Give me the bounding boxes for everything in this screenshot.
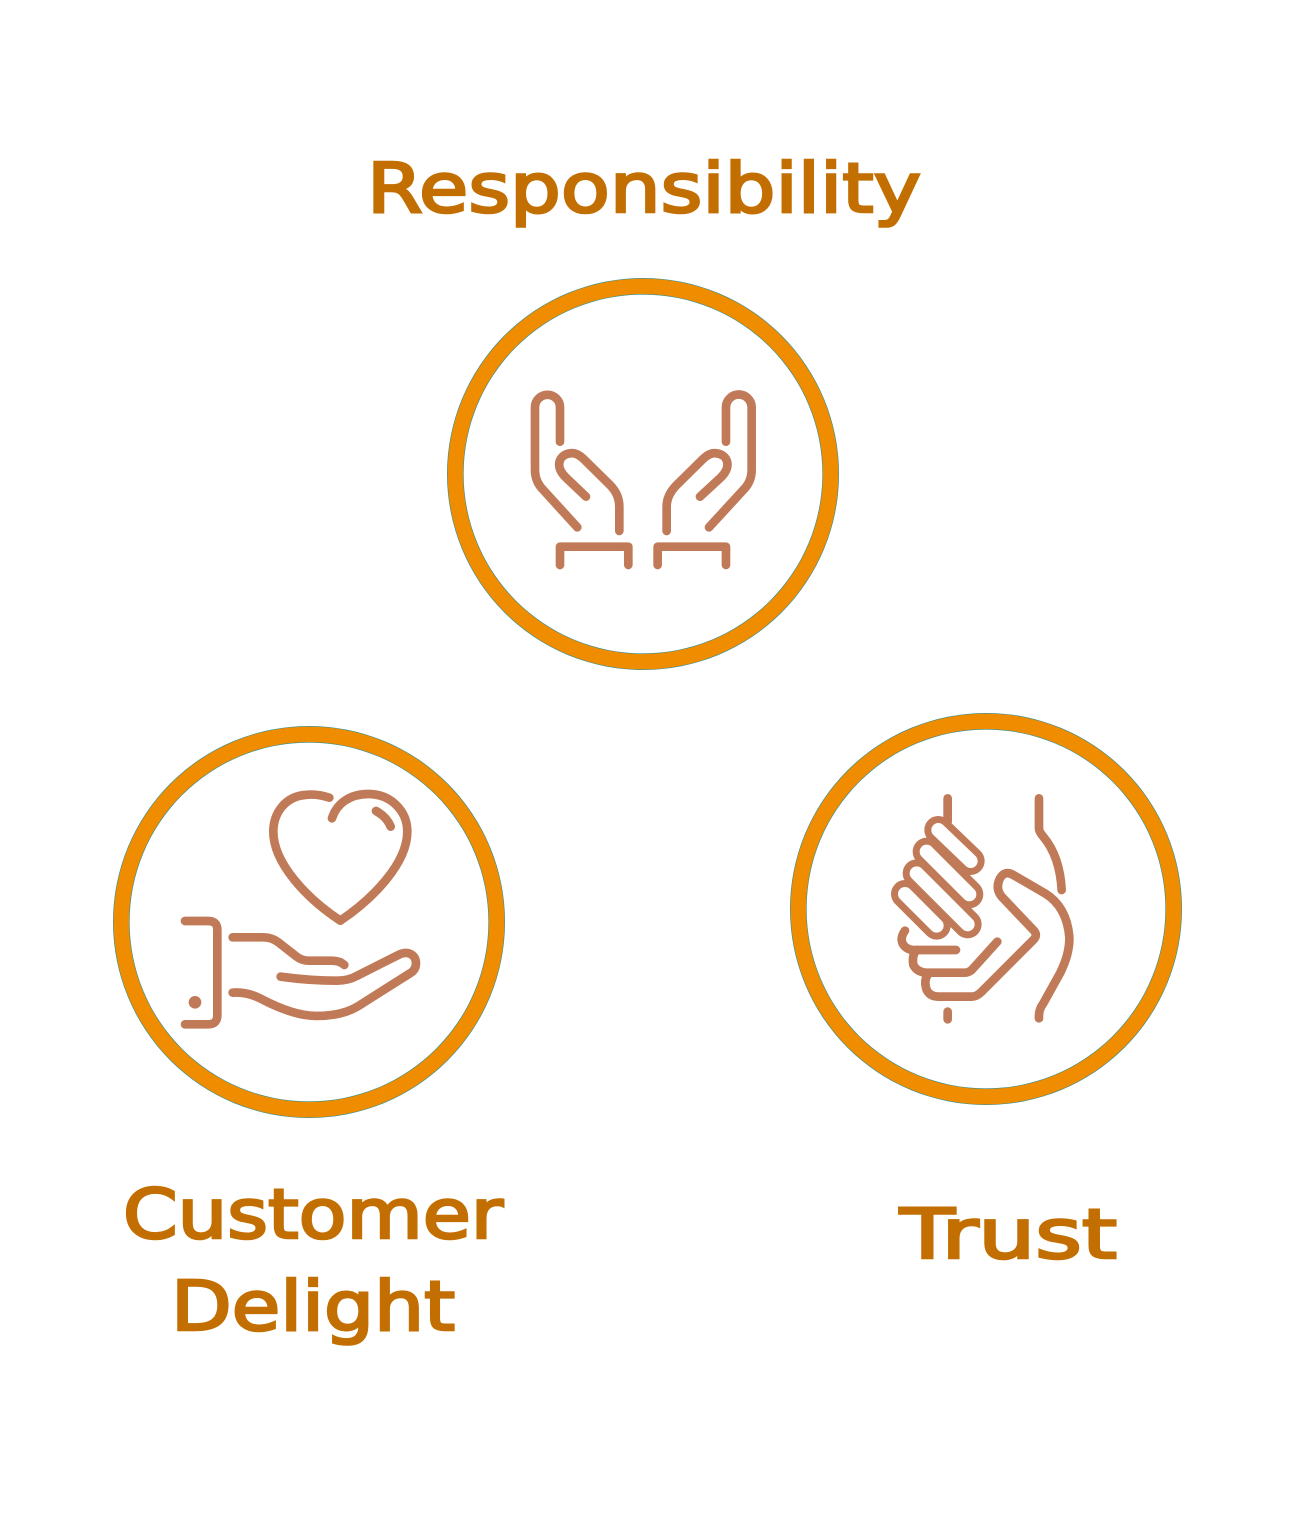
heading: Customer Delight: Delight xyxy=(171,1267,455,1347)
heading: Trust: Trust xyxy=(899,1195,1117,1275)
heading: Customer Delight: Customer xyxy=(123,1175,504,1255)
icon: clasped helping hands xyxy=(902,798,1069,1019)
panel: responsibility circle xyxy=(447,278,839,670)
heading: Responsibility: Responsibility xyxy=(367,149,921,229)
panel: customer delight circle xyxy=(113,726,505,1118)
icon: open cupped hands xyxy=(535,394,752,565)
heading: Customer Delight xyxy=(123,1175,504,1347)
panel: trust circle xyxy=(790,713,1182,1105)
icon: hand holding a heart xyxy=(185,794,416,1024)
